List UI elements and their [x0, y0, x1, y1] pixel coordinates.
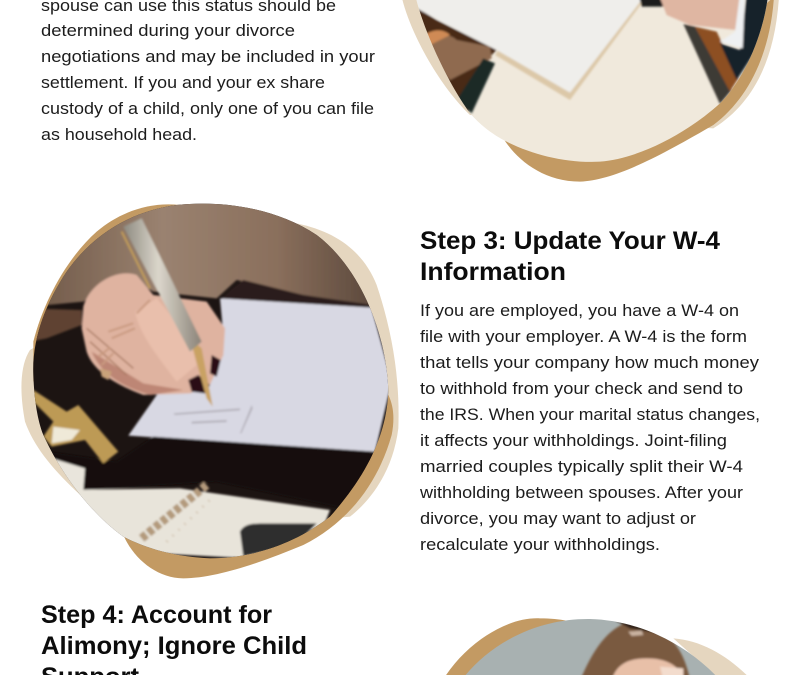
text block: step 3 body	[419, 301, 760, 554]
text block: step 3 body: divorce, you may want to adjust or	[420, 509, 696, 528]
text block: step 3 body: that tells your company how much money	[420, 353, 760, 372]
heading: step 3: Information	[420, 258, 566, 286]
heading: step 4: Step 4: Account for	[41, 601, 272, 629]
text block: step 2 filing status continuation: negotiations and may be included in your	[41, 47, 375, 66]
image: documents on a table in a blob frame	[400, 0, 800, 182]
text block: step 2 filing status continuation: custody of a child, only one of you can file	[41, 99, 374, 118]
text block: step 3 body: it affects your withholdings. Joint-filing	[420, 431, 727, 450]
heading: step 3	[420, 227, 720, 286]
text block: step 3 body: file with your employer. A W-4 is the form	[420, 327, 747, 346]
text block: step 3 body: to withhold from your check and send to	[420, 379, 743, 398]
text block: step 3 body: married couples typically split their W-4	[420, 457, 743, 476]
image: woman portrait in a blob frame, cropped	[446, 618, 746, 675]
text block: step 2 filing status continuation: determined during your divorce	[41, 21, 295, 40]
heading: step 3: Step 3: Update Your W-4	[420, 227, 720, 255]
heading: step 4: Alimony; Ignore Child	[41, 632, 307, 660]
text block: step 2 filing status continuation: as household head.	[41, 125, 197, 144]
text block: step 3 body: If you are employed, you have a W-4 on	[420, 301, 739, 320]
text block: step 3 body: withholding between spouses. After your	[419, 483, 743, 502]
heading: step 4	[41, 601, 307, 675]
text block: step 3 body: recalculate your withholdings.	[420, 535, 660, 554]
text block: step 3 body: the IRS. When your marital status changes,	[420, 405, 760, 424]
image: hand writing with a silver pen in a blob frame	[10, 195, 410, 578]
text block: step 2 filing status continuation	[41, 0, 375, 144]
text block: step 2 filing status continuation: settlement. If you and your ex share	[41, 73, 325, 92]
